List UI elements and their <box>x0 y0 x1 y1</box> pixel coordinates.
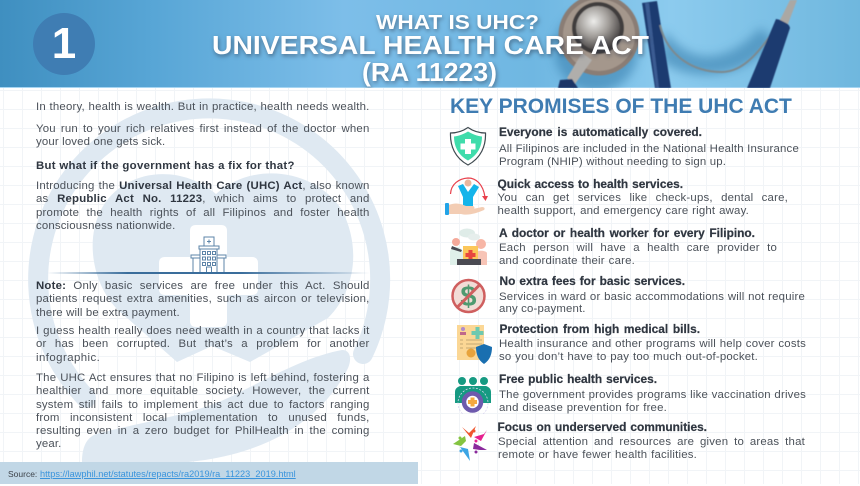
icon: crossed dollar: $ <box>460 281 477 313</box>
title: WHAT IS UHC? <box>376 12 539 34</box>
intro paragraph 2 <box>36 123 370 148</box>
text: Free public health services. <box>499 372 657 386</box>
icon: crossed dollar <box>451 278 486 314</box>
item: protection from bills <box>457 322 806 364</box>
introducing the act: consciousness nationwide. <box>36 220 176 232</box>
conclusion paragraph: year. <box>36 438 62 450</box>
icon: people and gear <box>455 377 491 414</box>
text: No extra fees for basic services. <box>500 274 685 288</box>
source bar: Source: <box>8 469 37 479</box>
item: free public health <box>455 372 806 414</box>
item: no extra fees <box>451 274 805 315</box>
note paragraph: Note: Only basic services are free under this Act. Should <box>36 280 370 292</box>
heading: key promises: KEY PROMISES OF THE UHC ACT <box>450 95 792 118</box>
item: everyone covered <box>450 125 799 168</box>
note paragraph: patients request extra amenities, such as aircon or television, <box>36 293 370 305</box>
text: and disease prevention for free. <box>499 402 667 414</box>
conclusion paragraph: system still fails to implement this act due to factors ranging <box>36 399 370 411</box>
text: remote or have fewer health facilities. <box>498 449 697 461</box>
wealth paragraph: infographic. <box>36 352 100 364</box>
text: health support, and emergency care right away. <box>498 205 749 217</box>
text: Health insurance and other programs will help cover costs <box>499 338 806 350</box>
icon: colorful figures <box>453 426 487 461</box>
text: Services in ward or basic accommodations will not require <box>499 290 805 302</box>
icon: shield <box>450 126 486 166</box>
divider line <box>47 272 370 274</box>
text: Protection from high medical bills. <box>500 322 700 336</box>
source bar: https://lawphil.net/statutes/repacts/ra2019/ra_11223_2019.html <box>40 469 296 479</box>
text: A doctor or health worker for every Filipino. <box>499 226 755 240</box>
title: (RA 11223) <box>362 57 497 87</box>
title <box>212 12 650 88</box>
conclusion paragraph: healthier and more equitable society. However, the current <box>36 385 370 397</box>
conclusion paragraph <box>36 372 370 450</box>
header banner <box>0 0 860 88</box>
text: Program (NHIP) without needing to sign up. <box>499 156 726 168</box>
icon: doctor and patient <box>450 228 487 265</box>
conclusion paragraph: resulting even in a zero budget for PhilHealth in the coming <box>36 425 370 437</box>
conclusion paragraph: The UHC Act ensures that no Filipino is left behind, fostering a <box>36 372 370 384</box>
text: Focus on underserved communities. <box>498 420 707 434</box>
introducing the act: promote the health rights of all Filipinos and foster health <box>36 207 370 219</box>
item: underserved communities <box>453 420 805 461</box>
intro paragraph 1: In theory, health is wealth. But in practice, health needs wealth. <box>36 101 370 113</box>
wealth paragraph <box>36 325 370 364</box>
introducing the act: as Republic Act No. 11223, which aims to protect and <box>36 193 370 205</box>
text: Everyone is automatically covered. <box>499 125 702 139</box>
number badge <box>33 13 95 75</box>
text: any co-payment. <box>499 303 586 315</box>
item: quick access <box>445 177 788 217</box>
text: The government provides programs like vaccination drives <box>499 389 806 401</box>
intro paragraph 2: You run to your rich relatives first instead of the doctor when <box>36 123 370 135</box>
text: and coordinate their care. <box>499 255 635 267</box>
text: All Filipinos are included in the National Health Insurance <box>499 143 799 155</box>
question: But what if the government has a fix for that? <box>36 160 295 172</box>
note paragraph: there will be extra payment. <box>36 307 180 319</box>
item: doctor for every Filipino <box>450 226 777 267</box>
conclusion paragraph: from inconsistent local implementation to unused funds, <box>36 412 370 424</box>
icon: bill and shield <box>457 325 492 364</box>
icon: hospital <box>190 236 226 272</box>
text: so you don’t have to pay too much out-of-pocket. <box>499 351 758 363</box>
introducing the act <box>36 180 370 232</box>
text: Quick access to health services. <box>498 177 683 191</box>
watermark: hand holding heart with cross <box>28 98 390 462</box>
intro paragraph 2: your loved one gets sick. <box>36 136 165 148</box>
wealth paragraph: or has been corrupted. But that’s a problem for another <box>36 338 370 350</box>
number badge: 1 <box>52 19 76 68</box>
source bar <box>0 462 418 484</box>
note paragraph <box>36 280 370 319</box>
header photo: stethoscope on blue gradient <box>0 0 860 88</box>
wealth paragraph: I guess health really does need wealth in a country that lacks it <box>36 325 370 337</box>
icon: hand lifting person <box>445 177 488 215</box>
title: UNIVERSAL HEALTH CARE ACT <box>212 30 649 60</box>
introducing the act: Introducing the Universal Health Care (UHC) Act, also known <box>36 180 370 192</box>
